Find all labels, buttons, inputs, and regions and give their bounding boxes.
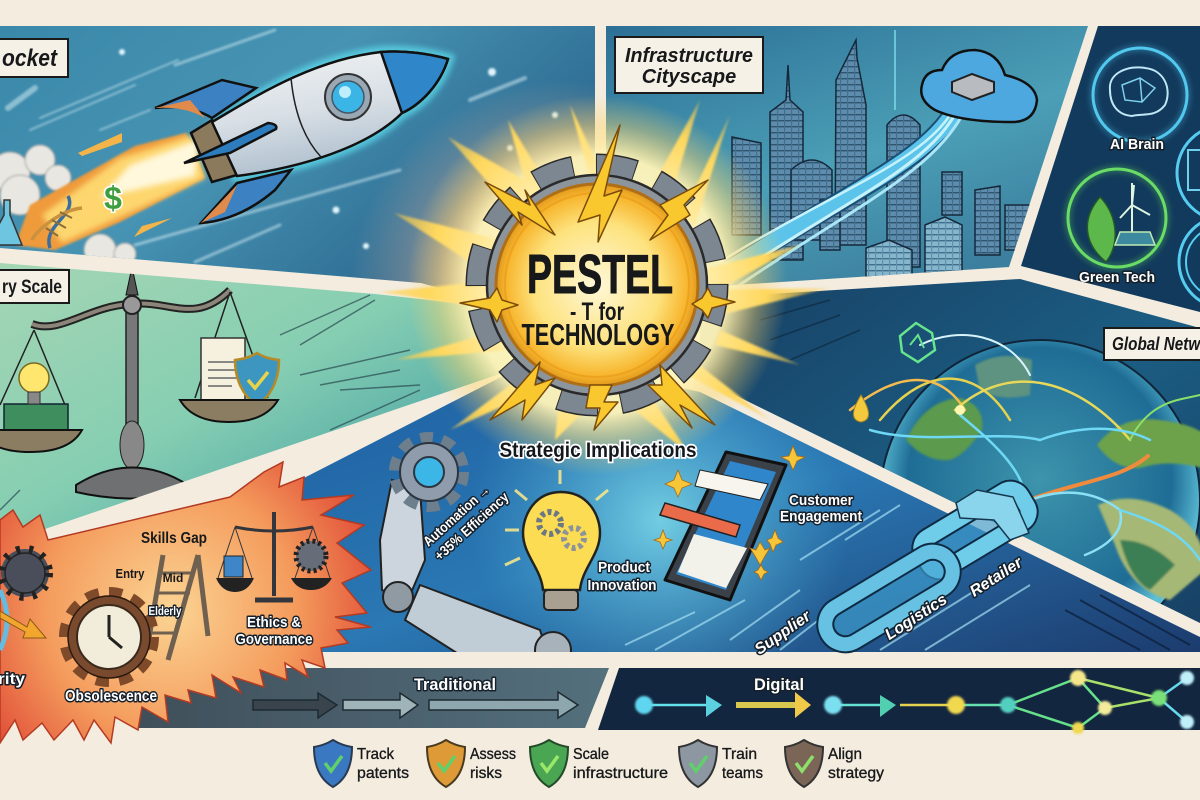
supply chain labels: Logistics — [882, 591, 950, 644]
supply chain labels: Retailer — [967, 554, 1026, 601]
domed building — [887, 115, 920, 267]
building — [732, 137, 761, 235]
ladder labels: Mid — [163, 571, 183, 585]
dna icon — [32, 196, 82, 248]
assess risks text: risks — [470, 765, 502, 782]
action shield: assess risks — [427, 740, 465, 787]
ladder labels: Elderly — [148, 604, 182, 618]
scale right pan: document and shield — [180, 292, 279, 422]
center glow — [407, 95, 787, 475]
icon: smartphone — [660, 452, 786, 600]
mid tower — [942, 172, 962, 215]
rocket label: ocket — [2, 45, 58, 72]
track patents text: Track — [357, 746, 395, 763]
scale infrastructure text: Scale — [573, 746, 609, 763]
digital label: Digital — [754, 675, 804, 694]
global network label — [1104, 328, 1200, 360]
foreground low block — [866, 240, 912, 278]
align strategy text: Align — [828, 746, 862, 763]
icon: virus — [1, 549, 49, 597]
skills gap label: Skills Gap — [141, 530, 207, 547]
partial neon circles — [1177, 125, 1200, 308]
train teams text: Train — [722, 746, 757, 763]
icon: ethics scale — [216, 512, 332, 600]
icon: green tech — [1068, 169, 1166, 267]
lightning bolts — [460, 125, 735, 430]
panel: global network — [700, 279, 1200, 623]
rocket label — [0, 39, 68, 77]
centre gear badge — [460, 125, 735, 430]
scale left pan: circuit and bulb — [0, 330, 82, 452]
tall tower — [835, 40, 866, 245]
action shield: track patents — [314, 740, 352, 787]
sparkles — [654, 446, 805, 580]
icon: clock gear — [65, 593, 153, 681]
strategic implications heading: Strategic Implications — [500, 439, 696, 462]
obsolescence label: Obsolescence — [65, 688, 157, 705]
product innovation label: Product — [598, 559, 650, 576]
action shield: align strategy — [785, 740, 823, 787]
automation label — [423, 489, 510, 560]
ethics and governance label: Governance — [236, 631, 312, 648]
action shield: train teams — [679, 740, 717, 787]
customer engagement label: Engagement — [780, 508, 862, 525]
supply chain labels: Supplier — [752, 607, 815, 659]
product innovation label: Innovation — [588, 577, 656, 594]
icon: robot arm with gear — [380, 439, 571, 668]
ladder labels: Entry — [116, 566, 145, 581]
burst rays — [380, 100, 830, 455]
icon: security shield and arrow — [0, 590, 46, 650]
panel: digital bar — [598, 668, 1200, 734]
panel: rocket — [0, 26, 595, 288]
small tower — [791, 160, 832, 240]
infrastructure cityscape label: Infrastructure — [625, 45, 753, 67]
right tower — [975, 186, 1000, 255]
automation label: +35% Efficiency — [431, 489, 512, 563]
icon: AI brain — [1093, 48, 1187, 142]
icon: ladder — [147, 555, 208, 660]
scale infrastructure text: infrastructure — [573, 765, 668, 782]
action shield: scale infrastructure — [530, 740, 568, 787]
panel: tech icons — [1021, 26, 1200, 312]
panel: traditional bar — [135, 668, 609, 728]
cloud — [0, 145, 136, 266]
icon: green recycle — [900, 323, 935, 362]
automation label: Automation → — [420, 481, 493, 549]
panel: strategic implications — [302, 376, 1200, 652]
rocket — [155, 51, 448, 223]
flask icon — [0, 200, 22, 245]
traditional label: Traditional — [414, 675, 496, 694]
AI brain label: AI Brain — [1110, 136, 1164, 153]
panel: risk burst — [0, 462, 371, 743]
foreground block — [925, 217, 962, 273]
assess risks text: Assess — [470, 746, 516, 763]
cloud icon — [921, 50, 1037, 122]
digital network — [635, 670, 1194, 734]
train teams text: teams — [722, 765, 763, 782]
infrastructure cityscape label: Cityscape — [642, 66, 736, 88]
panel: regulatory scale — [0, 263, 500, 529]
align strategy text: strategy — [828, 765, 884, 782]
ethics and governance label: Ethics & — [247, 614, 301, 631]
green tech label: Green Tech — [1079, 269, 1155, 286]
regulatory scale label — [0, 270, 69, 303]
globe — [882, 339, 1200, 605]
arrows — [253, 692, 578, 718]
chain links — [818, 485, 1033, 652]
spire tower — [770, 65, 803, 260]
icon: lightbulb — [505, 470, 608, 610]
title line 2: TECHNOLOGY — [522, 317, 675, 352]
rocket flame — [15, 133, 205, 250]
title: PESTEL — [527, 243, 673, 305]
track patents text: patents — [357, 765, 409, 782]
supply chain labels — [752, 554, 1026, 659]
icon: droplet — [853, 395, 869, 422]
infrastructure cityscape label — [615, 37, 763, 93]
customer engagement label: Customer — [789, 492, 853, 509]
fibre cables to cloud — [720, 105, 966, 288]
subtitle: - T for — [570, 298, 624, 326]
network arcs — [850, 335, 1200, 560]
ladder labels — [116, 566, 183, 618]
regulatory scale label: ry Scale — [2, 277, 62, 298]
panel: infrastructure cityscape — [606, 26, 1090, 288]
scale stand — [32, 267, 230, 498]
dollar sign: $ — [104, 180, 122, 216]
